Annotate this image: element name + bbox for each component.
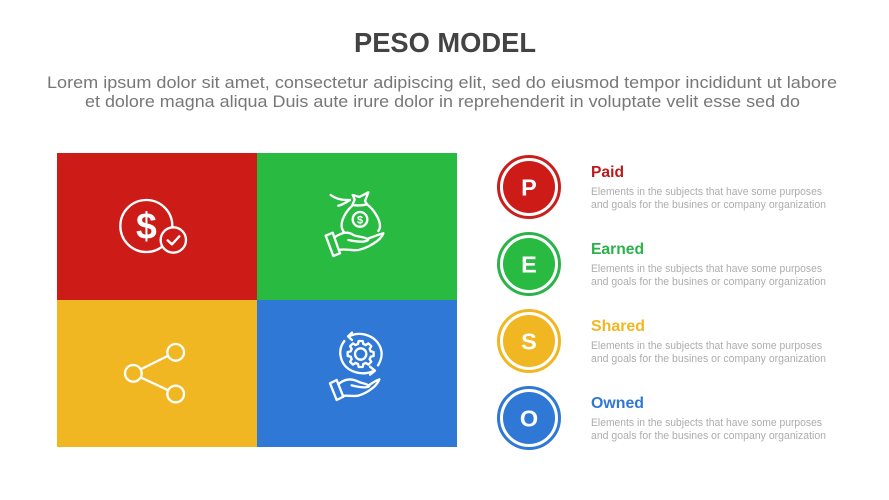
text block: owned: and goals for the busines or company organization [591,430,826,442]
heading: paid: Paid [591,164,624,181]
title: PESO MODEL [354,27,536,58]
badge: P: P [521,174,537,200]
text block: paid: Elements in the subjects that have some purposes [591,186,822,198]
subtitle: et dolore magna aliqua Duis aute irure dolor in reprehenderit in voluptate velit esse sed do [85,93,800,111]
panel: earned quadrant [257,153,457,300]
text block: earned: Elements in the subjects that have some purposes [591,263,822,275]
text block: owned [591,417,826,442]
badge: S [498,310,560,372]
subtitle: Lorem ipsum dolor sit amet, consectetur adipiscing elit, sed do eiusmod tempor incididunt ut labore [47,74,837,92]
badge: P [498,156,560,218]
text block: paid [591,186,826,211]
badge: E [498,234,560,294]
text block: owned: Elements in the subjects that have some purposes [591,417,822,429]
text block: paid: and goals for the busines or company organization [591,199,826,211]
panel: owned quadrant [257,300,457,447]
heading: earned: Earned [591,241,644,258]
icon: money bag in hand [326,192,383,256]
text block: earned: and goals for the busines or company organization [591,276,826,288]
badge: E: E [521,252,537,278]
text block: shared: and goals for the busines or company organization [591,353,826,365]
badge: O [498,388,560,448]
text block: shared: Elements in the subjects that have some purposes [591,340,822,352]
icon: gear cycle in hand [330,333,382,400]
heading: owned: Owned [591,395,644,412]
panel: shared quadrant [57,300,257,447]
heading: shared: Shared [591,318,645,335]
legend row: owned [498,388,826,448]
badge: S: S [521,328,537,354]
legend row: paid [498,156,826,218]
icon: dollar with check [120,200,186,253]
legend row: shared [498,310,826,372]
panel: quadrant matrix [57,153,457,447]
text block: earned [591,263,826,288]
icon: dollar with check: $ [136,204,157,246]
text block: shared [591,340,826,365]
badge: O: O [520,406,538,432]
panel: paid quadrant [57,153,257,300]
subtitle [47,74,837,111]
legend row: earned [498,234,826,294]
icon: money bag in hand: $ [357,214,363,226]
icon: share nodes [125,344,184,402]
